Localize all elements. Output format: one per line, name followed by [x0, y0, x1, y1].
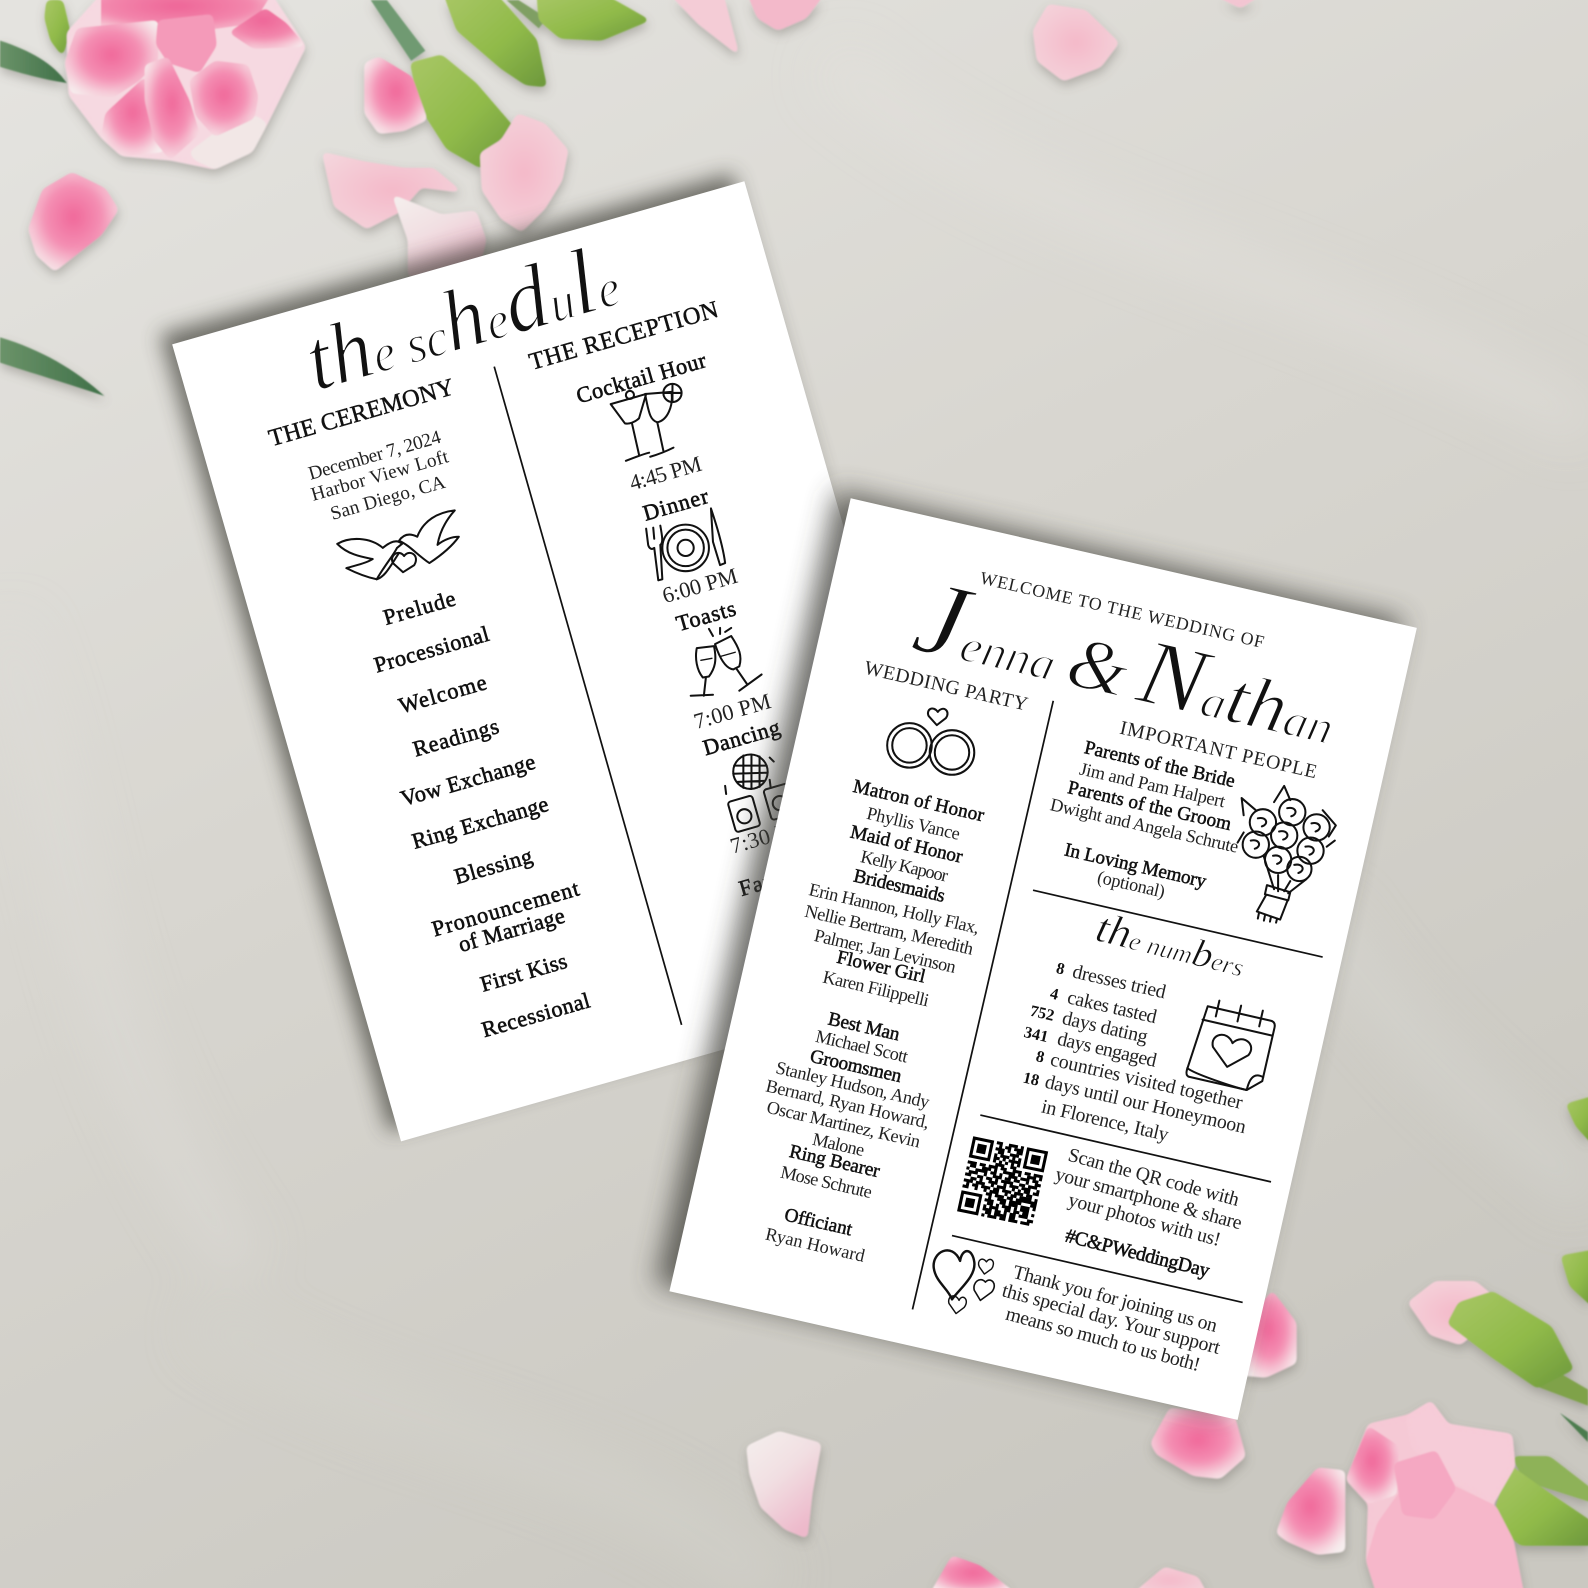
heading: important people: IMPORTANT PEOPLE: [1118, 718, 1319, 783]
ceremony order list: Pronouncement: [429, 875, 582, 942]
ceremony order list: of Marriage: [455, 902, 568, 957]
top left carnation: [0, 0, 306, 169]
QR instructions: your photos with us!: [1066, 1190, 1223, 1251]
the numbers list: days until our Honeymoon: [1043, 1072, 1248, 1138]
farewell label: Farewell: [736, 853, 826, 901]
ceremony order list: Blessing: [451, 843, 535, 889]
QR code: [957, 1136, 1048, 1226]
the numbers list: cakes tasted: [1065, 987, 1159, 1028]
title: couple names: Jenna & Nathan: [904, 557, 1350, 767]
heading: wedding party: WEDDING PARTY: [862, 658, 1030, 716]
thank you message: [1000, 1262, 1223, 1376]
the numbers list: 4: [1048, 985, 1060, 1004]
icon: disco ball and speakers: [725, 755, 796, 832]
date and venue: [306, 427, 452, 525]
time 6:00 PM: 6:00 PM: [659, 563, 740, 608]
the numbers list: 8: [1034, 1048, 1046, 1067]
date and venue: Harbor View Loft: [309, 446, 452, 506]
petals along top edge: [669, 0, 1266, 81]
QR instructions: Scan the QR code with: [1066, 1145, 1242, 1211]
bottom petals: [930, 1467, 1345, 1588]
ceremony order list: First Kiss: [477, 948, 570, 997]
wedding party list: Ryan Howard: [764, 1223, 867, 1266]
divider line: [952, 1236, 1243, 1302]
wedding party list: Best Man: [826, 1008, 902, 1046]
loose pink petal left: [28, 172, 118, 271]
icon: hearts: [934, 1250, 994, 1314]
dancing label: Dancing: [700, 714, 783, 760]
wedding party list: Bernard, Ryan Howard,: [764, 1075, 931, 1132]
toasts label: Toasts: [673, 595, 739, 636]
wedding party list: Malone: [811, 1129, 866, 1160]
divider line: [980, 1115, 1271, 1182]
divider line: [1033, 890, 1323, 957]
icon: plate and cutlery: [646, 508, 725, 580]
the numbers list: days engaged: [1055, 1029, 1159, 1072]
icon: wedding rings with heart: [887, 709, 974, 775]
wedding party list: Michael Scott: [814, 1026, 910, 1067]
the numbers list: [1021, 960, 1248, 1146]
wedding party list: Erin Hannon, Holly Flax,: [807, 879, 981, 938]
important people list: Dwight and Angela Schrute: [1048, 794, 1240, 857]
important people list: [1048, 737, 1240, 902]
the numbers list: days dating: [1060, 1008, 1150, 1048]
important people list: Jim and Pam Halpert: [1078, 758, 1227, 811]
pale pink bloom on bud: [480, 113, 568, 232]
wedding party list: Palmer, Jan Levinson: [812, 925, 958, 977]
right side green buds and stems: [1408, 1096, 1588, 1545]
green buds top: [371, 0, 650, 168]
icon: rose bouquet: [1238, 786, 1336, 923]
important people list: In Loving Memory: [1062, 839, 1209, 893]
column divider: [912, 701, 1053, 1309]
wedding party list: Karen Filippelli: [821, 966, 931, 1010]
wedding party list: Nellie Bertram, Meredith: [803, 901, 975, 959]
ceremony order list: Readings: [410, 713, 502, 762]
ceremony order list: Processional: [371, 621, 492, 678]
the numbers list: countries visited together: [1048, 1049, 1245, 1114]
bottom right carnation: [1346, 1401, 1524, 1588]
heading: welcome to the wedding of: WELCOME TO THE WEDDING OF: [978, 567, 1266, 652]
shadow of schedule card: [160, 173, 961, 1131]
wedding party list: Phyllis Vance: [865, 803, 962, 844]
wedding party list: Kelly Kapoor: [859, 846, 950, 886]
pink petal beside bud: [365, 57, 427, 134]
the numbers list: dresses tried: [1070, 961, 1168, 1003]
petals under welcome card: [1150, 1290, 1296, 1479]
date and venue: December 7, 2024: [306, 427, 444, 485]
ceremony order list: Prelude: [380, 585, 458, 630]
the numbers list: in Florence, Italy: [1039, 1096, 1171, 1146]
time 7:00 PM: 7:00 PM: [691, 688, 774, 734]
wedding party list: [764, 776, 987, 1266]
dinner label: Dinner: [640, 483, 712, 526]
wedding party list: Ring Bearer: [787, 1141, 882, 1182]
heading: the numbers: the numbers: [1091, 904, 1250, 986]
ceremony order list: [371, 585, 593, 1042]
green leaf left edge: [0, 337, 104, 396]
time 7:30 PM: 7:30 PM: [727, 812, 810, 859]
QR instructions: #C&PWeddingDay: [1063, 1226, 1212, 1282]
wedding party list: Stanley Hudson, Andy: [774, 1057, 932, 1112]
QR instructions: your smartphone & share: [1053, 1164, 1244, 1234]
important people list: Parents of the Groom: [1066, 777, 1234, 835]
icon: calendar with heart: [1186, 997, 1278, 1093]
ceremony order list: Welcome: [396, 669, 489, 718]
title: the schedule: the schedule: [293, 223, 629, 410]
the numbers list: 752: [1028, 1003, 1056, 1025]
wedding party list: Officiant: [782, 1204, 855, 1241]
heading: the reception: THE RECEPTION: [526, 297, 721, 376]
wedding party list: Mose Schrute: [779, 1162, 874, 1202]
date and venue: San Diego, CA: [328, 472, 448, 525]
column divider: [494, 367, 682, 1025]
icon: cocktails: [611, 384, 682, 461]
panel: schedule card: [172, 181, 973, 1141]
wedding party list: Maid of Honor: [848, 821, 965, 868]
QR instructions: [1053, 1145, 1244, 1282]
icon: two doves with heart: [337, 510, 459, 579]
ceremony order list: Ring Exchange: [409, 791, 551, 854]
ceremony order list: Recessional: [479, 987, 593, 1042]
cocktail hour label: Cocktail Hour: [573, 347, 709, 408]
pale petals above schedule card: [322, 152, 463, 229]
thank you message: Thank you for joining us on: [1011, 1262, 1220, 1337]
thank you message: this special day. Your support: [1000, 1280, 1223, 1359]
the numbers list: 341: [1022, 1024, 1050, 1046]
panel: welcome card: [669, 498, 1417, 1420]
ceremony order list: Vow Exchange: [398, 749, 538, 811]
the numbers list: 18: [1021, 1069, 1041, 1090]
important people list: (optional): [1095, 867, 1167, 902]
time 4:45 PM: 4:45 PM: [626, 451, 704, 495]
shadow of welcome card: [655, 490, 1403, 1412]
pale petal bottom centre: [746, 1431, 821, 1538]
wedding party list: Matron of Honor: [851, 776, 987, 827]
important people list: Parents of the Bride: [1082, 737, 1237, 792]
wedding party list: Flower Girl: [835, 947, 927, 988]
thank you message: means so much to us both!: [1003, 1304, 1202, 1376]
wedding party list: Bridesmaids: [852, 865, 947, 907]
heading: the ceremony: THE CEREMONY: [266, 374, 457, 452]
wedding party list: Groomsmen: [808, 1046, 904, 1087]
wedding party list: Oscar Martinez, Kevin: [765, 1097, 922, 1152]
icon: champagne flutes: [691, 628, 762, 696]
the numbers list: 8: [1054, 960, 1066, 979]
